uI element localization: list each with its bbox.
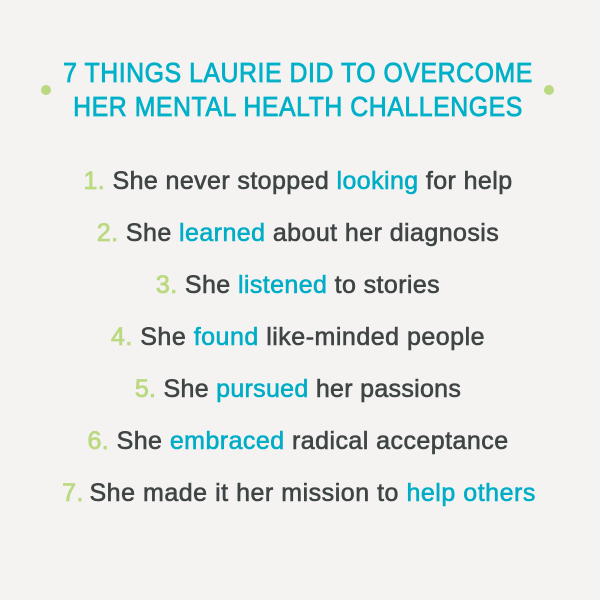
heading: [63, 57, 533, 122]
left decorative dot: [41, 85, 51, 95]
title line 2: HER MENTAL HEALTH CHALLENGES: [73, 91, 523, 122]
item 4: 4. She found like-minded people: [111, 323, 485, 351]
list of seven things: [62, 167, 536, 507]
item 5: 5. She pursued her passions: [135, 375, 461, 403]
right decorative dot: [544, 85, 554, 95]
item 6: 6. She embraced radical acceptance: [87, 427, 509, 455]
item 7: 7. She made it her mission to help others: [62, 479, 536, 507]
item 3: 3. She listened to stories: [156, 271, 440, 299]
title line 1: 7 THINGS LAURIE DID TO OVERCOME: [63, 57, 533, 88]
item 1: 1. She never stopped looking for help: [84, 167, 512, 195]
item 2: 2. She learned about her diagnosis: [97, 219, 499, 247]
